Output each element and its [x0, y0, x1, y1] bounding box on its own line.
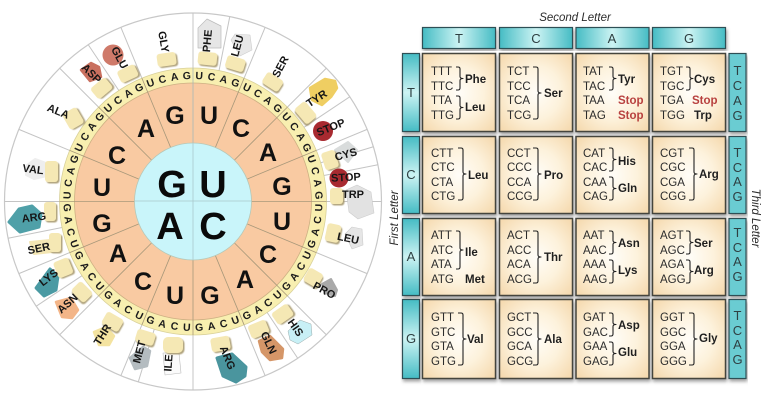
third-base letters: C: [112, 93, 125, 108]
column headers: A: [608, 31, 617, 46]
codons: first letter T: TTT: [431, 66, 452, 78]
codons: first letter G: GAA: [583, 341, 608, 353]
third-base letters: G: [71, 249, 86, 262]
amino acid: TRP: [330, 185, 374, 219]
third-base letters: U: [195, 70, 203, 82]
codons: first letter C: CGA: [660, 177, 685, 189]
third-base letters: U: [313, 204, 326, 212]
third-base letters: G: [145, 314, 156, 328]
amino acid names: Trp: [694, 110, 712, 122]
codons: first letter G: GCA: [507, 341, 532, 353]
codon wheel: [4, 13, 382, 390]
codons: first letter T: [431, 66, 685, 122]
codons: first letter G: GGC: [660, 327, 686, 339]
amino acid: ASN: ASN: [55, 292, 81, 316]
codons: first letter G: GGG: [660, 356, 687, 368]
codon braces: [456, 67, 697, 365]
third-base letters: G: [280, 279, 294, 294]
codons: first letter T: TTG: [431, 110, 454, 122]
amino acid: STOP lower: STOP: [331, 171, 361, 185]
third-base letters: C: [170, 320, 179, 333]
second-base letters: A: [137, 115, 155, 143]
codons: first letter C: CAA: [583, 177, 607, 189]
amino acid sector dividers: [4, 13, 382, 390]
amino acid: ASP: ASP: [79, 62, 103, 86]
amino acid names: Asp: [618, 320, 640, 332]
centre letters: U: [199, 164, 227, 206]
codons: first letter T: TCA: [507, 95, 530, 107]
amino acid: ASN: [55, 281, 93, 318]
amino acid: GLY: [155, 30, 177, 67]
codons: first letter A: ATC: [431, 245, 453, 257]
codons: first letter A: ACC: [507, 245, 531, 257]
amino acid: STOP upper: STOP: [315, 117, 347, 139]
codons: first letter G: GTA: [431, 341, 454, 353]
amino acid names: Ala: [544, 334, 562, 346]
third-base letters: C: [157, 73, 168, 87]
amino acid: CYS: [321, 142, 358, 171]
amino acid: PHE: [197, 19, 221, 66]
third-base letters: A: [207, 320, 217, 333]
third-base letters: U: [183, 322, 191, 334]
codons: first letter A: AAG: [583, 274, 607, 286]
amino acid: TYR: TYR: [305, 88, 330, 110]
third-base letters: C: [251, 87, 264, 101]
amino acid names: Lys: [618, 265, 637, 277]
amino acid: MET: [130, 328, 156, 369]
third-base letters: G: [270, 101, 284, 116]
third-base letters: G: [93, 110, 107, 124]
third-base letters: U: [300, 250, 314, 262]
amino acid names: Tyr: [618, 74, 636, 86]
amino acid names: [465, 74, 719, 359]
amino acid names: Stop: [692, 95, 718, 107]
amino acid: ALA: [45, 102, 85, 130]
second-base letters: G: [165, 102, 185, 130]
third-base letters: G: [182, 70, 191, 82]
heading: Third Letter: Third Letter: [749, 189, 761, 249]
third-base letters: C: [78, 130, 93, 143]
codons: first letter T: TCG: [507, 110, 531, 122]
third-base letters: A: [122, 87, 135, 101]
third-base letters: C: [219, 317, 229, 331]
centre letters: G: [157, 164, 187, 206]
third-base letters: A: [85, 120, 100, 133]
amino acid: ARG bottom: [210, 335, 246, 382]
amino acid names: Gly: [699, 333, 718, 345]
third-base letters: C: [308, 166, 322, 177]
third-base letters: A: [111, 296, 125, 310]
table cells: [422, 54, 726, 378]
codons: first letter A: AGG: [660, 274, 686, 286]
amino acid: GLN: GLN: [258, 330, 278, 356]
amino acid names: Ser: [544, 88, 563, 100]
heading: Second Letter: Second Letter: [539, 12, 612, 24]
amino acid: ILE: [162, 337, 183, 375]
second-base letters: U: [93, 174, 111, 202]
codons: first letter C: CAT: [583, 148, 605, 160]
amino acid names: His: [618, 156, 636, 168]
codons: first letter C: CCC: [507, 162, 532, 174]
third letter column: [729, 54, 746, 378]
third-base letters: U: [92, 280, 106, 293]
codons: first letter C: CCG: [507, 191, 533, 203]
codons: first letter G: GAC: [583, 327, 608, 339]
third-base letters: A: [252, 303, 265, 317]
codons: first letter A: AGA: [660, 259, 685, 271]
codons: first letter A: AAC: [583, 245, 607, 257]
third letter column: T: [734, 308, 742, 323]
amino acid names: Leu: [465, 102, 485, 114]
second-base letters: A: [259, 139, 277, 167]
third-base letters: G: [312, 191, 325, 200]
codon table: [389, 12, 761, 378]
third-base letters: A: [311, 178, 324, 188]
amino acid: HIS: [271, 303, 312, 344]
amino acid: TYR: [294, 79, 337, 125]
amino acid names: Ser: [694, 238, 713, 250]
amino acid: MET: MET: [131, 339, 149, 365]
third-base letters: G: [68, 153, 82, 165]
codons: first letter T: TGA: [660, 95, 684, 107]
codons: first letter T: TCC: [507, 81, 531, 93]
column headers: [422, 28, 726, 48]
first letter column: A: [407, 249, 416, 264]
codons: first letter C: CCA: [507, 177, 532, 189]
amino acid names: Cys: [694, 74, 715, 86]
third letter column: C: [733, 78, 742, 93]
codons: first letter G: GAG: [583, 356, 609, 368]
codons: first letter C: [431, 148, 686, 203]
third letter column: G: [732, 352, 743, 367]
amino acid names: Pro: [544, 170, 563, 182]
third-base letters: G: [305, 238, 319, 250]
codons: first letter C: CGT: [660, 148, 684, 160]
column headers: C: [531, 31, 541, 46]
amino acid names: Stop: [618, 110, 644, 122]
codons: first letter A: ATG: [431, 274, 454, 286]
third-base letters: U: [133, 309, 145, 323]
third-base letters: U: [279, 110, 293, 124]
heading: First Letter: First Letter: [389, 189, 401, 245]
third-base letters: C: [207, 71, 216, 84]
third-base letters: A: [65, 165, 78, 176]
amino acid: THR: [92, 311, 124, 348]
third-base letters: A: [218, 73, 229, 87]
amino acid: HIS: HIS: [285, 317, 305, 339]
third-base letters: C: [84, 270, 99, 284]
amino acid: PHE: PHE: [201, 29, 215, 53]
third-base letters: C: [287, 120, 301, 134]
second-base letters: A: [236, 266, 254, 294]
amino acid: SER top: [261, 54, 292, 92]
codons: first letter C: CAC: [583, 162, 607, 174]
codons: first letter G: GCC: [507, 327, 533, 339]
column headers: G: [684, 31, 694, 46]
codons: first letter C: CCT: [507, 148, 531, 160]
amino acid: CYS: CYS: [334, 146, 358, 164]
amino acid: PRO: PRO: [311, 280, 338, 302]
third letter column: G: [732, 189, 743, 204]
second-base letters: C: [232, 115, 250, 143]
first letter column: C: [406, 167, 416, 182]
amino acid names: Stop: [618, 95, 644, 107]
codons: first letter G: GTT: [431, 312, 454, 324]
codons: first letter T: TTC: [431, 81, 453, 93]
third-base letters: U: [102, 102, 116, 116]
amino acid: ARG bottom: ARG: [217, 344, 237, 372]
codons: first letter C: CTC: [431, 162, 455, 174]
third-base letters: C: [62, 178, 75, 188]
codons: first letter A: ATA: [431, 259, 452, 271]
third-base letters: U: [61, 191, 74, 199]
amino acid: SER left: [27, 233, 61, 257]
amino acid names: Ile: [465, 247, 478, 259]
centre letters: A: [156, 206, 184, 248]
amino acid: SER left: SER: [27, 241, 51, 257]
third letter column: A: [733, 93, 742, 108]
third-base letters: A: [288, 270, 302, 283]
first letter column: [402, 54, 420, 378]
codons: first letter T: TCT: [507, 66, 529, 78]
third-base yellow ring: [60, 68, 326, 335]
centre letters: [156, 164, 227, 248]
amino acid names: Thr: [544, 252, 563, 264]
third-base letters: G: [241, 309, 253, 323]
third-base letters: G: [60, 203, 73, 212]
third letter column: A: [733, 174, 742, 189]
third-base letters: U: [145, 76, 156, 90]
third-base letters: U: [271, 288, 285, 302]
codons: first letter T: TTA: [431, 95, 452, 107]
second-base letters: G: [272, 173, 292, 201]
codons: first letter G: GAT: [583, 312, 606, 324]
amino acid names: Glu: [618, 347, 637, 359]
codons: first letter A: [431, 230, 686, 286]
amino acid: VAL: VAL: [22, 163, 45, 177]
first-base centre circle: [134, 143, 252, 260]
amino acid names: Arg: [694, 265, 714, 277]
second-base letters: C: [134, 268, 152, 296]
third-base letters: C: [312, 215, 325, 225]
amino acid: STOP lower: [330, 168, 361, 188]
codons: first letter A: AGT: [660, 230, 684, 242]
third-base letters: U: [304, 154, 318, 165]
ring dividers: [60, 68, 326, 335]
first letter column: G: [406, 331, 416, 346]
codons: first letter T: TGT: [660, 66, 683, 78]
amino acid: LEU right: [324, 223, 363, 249]
third letter column: C: [733, 240, 742, 255]
third-base letters: U: [67, 239, 81, 250]
amino acid: LEU top: [224, 34, 252, 73]
amino acid: TRP: TRP: [342, 189, 364, 201]
third-base letters: A: [309, 227, 323, 237]
codons: first letter G: GGT: [660, 312, 685, 324]
third-base letters: A: [77, 260, 92, 273]
second-base letters: [92, 102, 292, 310]
third-base letters: A: [261, 94, 275, 108]
codons: first letter T: TGC: [660, 81, 684, 93]
codons: first letter T: TAA: [583, 95, 605, 107]
amino acid names: Gln: [618, 183, 637, 195]
centre cross lines: [134, 143, 252, 260]
first letter column: T: [407, 85, 415, 100]
second-base letters: U: [166, 282, 184, 310]
third letter column: C: [733, 323, 742, 338]
third-base letters: C: [122, 303, 135, 317]
amino acid: ARG left: [9, 202, 56, 232]
amino acid: VAL: [22, 159, 58, 182]
amino acid: ARG left: ARG: [21, 211, 47, 225]
third letter column: A: [733, 337, 742, 352]
amino acid names: Val: [467, 334, 484, 346]
codons: first letter C: CTG: [431, 191, 455, 203]
third-base letters: A: [61, 215, 74, 225]
codons: first letter G: GCT: [507, 312, 531, 324]
amino acid: ILE: ILE: [162, 354, 176, 372]
third-base letters: [60, 70, 326, 334]
amino acid: LYS: LYS: [37, 267, 61, 289]
centre letters: C: [199, 206, 227, 248]
third letter column: G: [732, 108, 743, 123]
codons: first letter C: CGG: [660, 191, 686, 203]
second-base letters: C: [259, 241, 277, 269]
amino acid: GLU: [102, 44, 139, 84]
codons: first letter T: TAC: [583, 81, 605, 93]
codons: first letter C: CTT: [431, 148, 453, 160]
third-base letters: C: [262, 296, 275, 310]
third letter column: T: [734, 63, 742, 78]
third-base letters: U: [241, 81, 253, 95]
codons: first letter T: TGG: [660, 110, 685, 122]
amino acid: LEU top: LEU: [229, 34, 247, 58]
amino acid: GLU: GLU: [108, 45, 130, 71]
third-base letters: U: [230, 314, 241, 328]
third-base letters: G: [133, 81, 146, 95]
codons: first letter A: ACG: [507, 274, 532, 286]
third-base letters: G: [299, 142, 314, 154]
second-base letters: U: [273, 208, 291, 236]
codons: first letter C: CAG: [583, 191, 608, 203]
codons: first letter A: AAT: [583, 230, 605, 242]
amino acid: ALA: ALA: [45, 102, 71, 122]
amino acid names: Arg: [699, 169, 719, 181]
codons: first letter C: CTA: [431, 177, 453, 189]
amino acid names: Met: [465, 274, 485, 286]
codons: first letter T: TAT: [583, 66, 603, 78]
amino acid: GLY: GLY: [155, 30, 171, 54]
third-base letters: A: [157, 317, 168, 331]
amino acid names: Asn: [618, 238, 640, 250]
third-base letters: C: [294, 260, 309, 273]
codons: first letter A: AGC: [660, 245, 685, 257]
third letter column: C: [733, 160, 742, 175]
codons: first letter A: ATT: [431, 230, 452, 242]
codons: first letter G: GCG: [507, 356, 533, 368]
codons: first letter G: GGA: [660, 341, 686, 353]
third-base letters: G: [195, 322, 204, 334]
second-base letters: G: [200, 282, 220, 310]
codons: first letter G: GTC: [431, 327, 455, 339]
third-base letters: U: [72, 142, 87, 154]
codons: first letter A: ACA: [507, 259, 531, 271]
amino acid: GLN: [247, 319, 283, 360]
amino acid: PRO: [303, 267, 338, 302]
codons: first letter G: [431, 312, 687, 368]
second-base letters: A: [109, 240, 127, 268]
amino acid names: Leu: [468, 170, 488, 182]
codons: first letter T: TAG: [583, 110, 606, 122]
third-base letters: A: [294, 131, 308, 144]
third-base letters: A: [170, 71, 180, 84]
amino acid: ASP: [79, 62, 113, 100]
second-base letters: C: [108, 142, 126, 170]
amino acid names: Phe: [465, 74, 486, 86]
codons: first letter A: AAA: [583, 259, 606, 271]
amino acid: THR: THR: [92, 322, 114, 348]
amino acid: LEU right: LEU: [336, 231, 360, 247]
third letter column: T: [734, 225, 742, 240]
codons: first letter G: GTG: [431, 356, 456, 368]
third letter column: T: [734, 145, 742, 160]
second-base letters: G: [92, 210, 112, 238]
third-base letters: C: [64, 227, 77, 238]
third letter column: G: [732, 269, 743, 284]
outer ring: [4, 13, 382, 390]
column headers: T: [455, 31, 463, 46]
amino acid: SER top: SER: [270, 54, 292, 80]
third-base letters: G: [229, 76, 241, 90]
codons: first letter A: ACT: [507, 230, 530, 242]
second-base orange ring: [74, 83, 312, 320]
second-base letters: U: [200, 102, 218, 130]
third-base letters: G: [101, 288, 115, 302]
third letter column: A: [733, 254, 742, 269]
amino acid: LYS: [36, 257, 74, 296]
codons: first letter C: CGC: [660, 162, 686, 174]
